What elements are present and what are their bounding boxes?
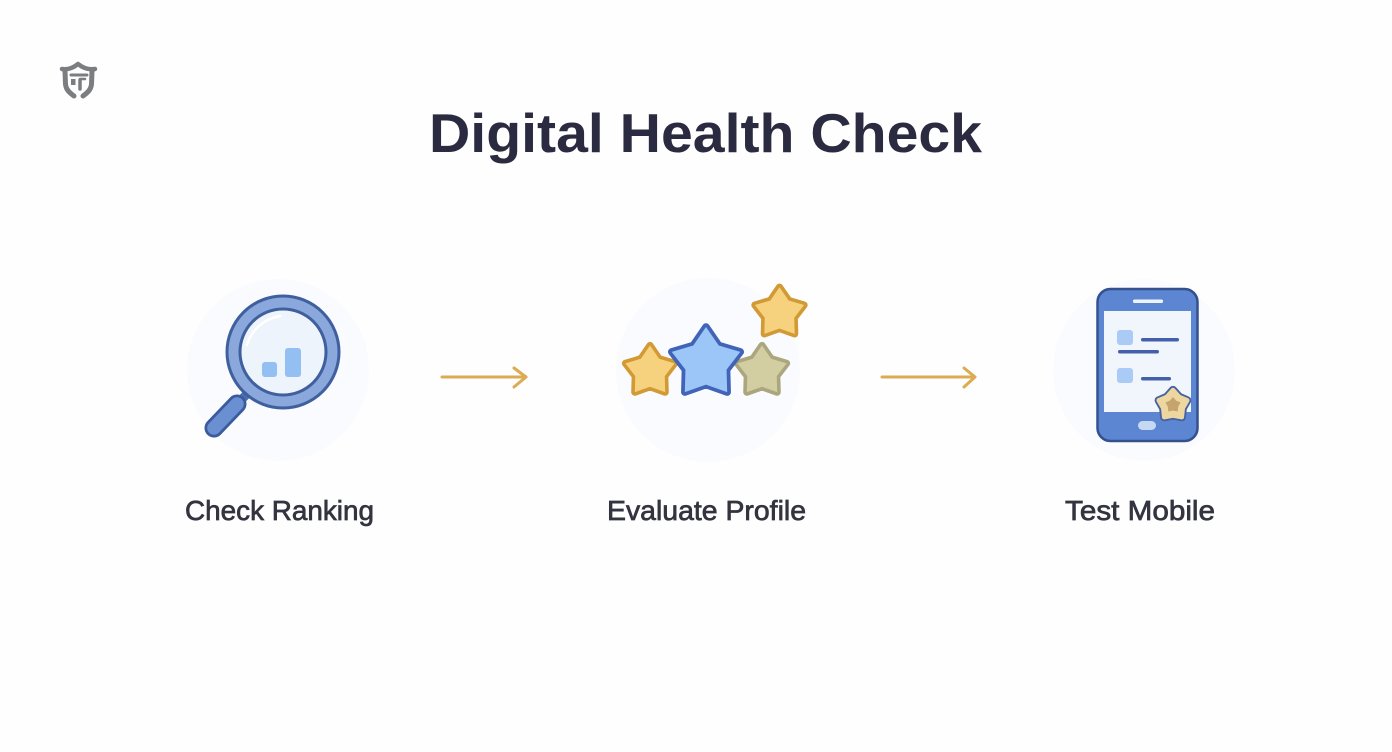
step 1: check ranking: [185, 279, 374, 526]
icon backdrop circle: [1053, 279, 1235, 461]
bars: [262, 362, 277, 377]
label: Check Ranking: [185, 495, 374, 526]
arrow 1: [442, 368, 526, 387]
step 3: test mobile: [1053, 279, 1235, 526]
icon: shield logo: [62, 64, 95, 96]
icon: magnifying glass: [214, 296, 339, 428]
icon: stars: [625, 287, 804, 392]
step 2: evaluate profile: [607, 278, 806, 526]
icon backdrop circle: [616, 278, 800, 462]
label: Evaluate Profile: [607, 495, 806, 526]
label: Test Mobile: [1065, 495, 1215, 526]
phone star badge: [1159, 390, 1187, 417]
icon backdrop circle: [187, 279, 369, 461]
arrow 2: [882, 368, 975, 387]
title: Digital Health Check: [429, 102, 982, 164]
icon: smartphone: [1098, 289, 1198, 441]
